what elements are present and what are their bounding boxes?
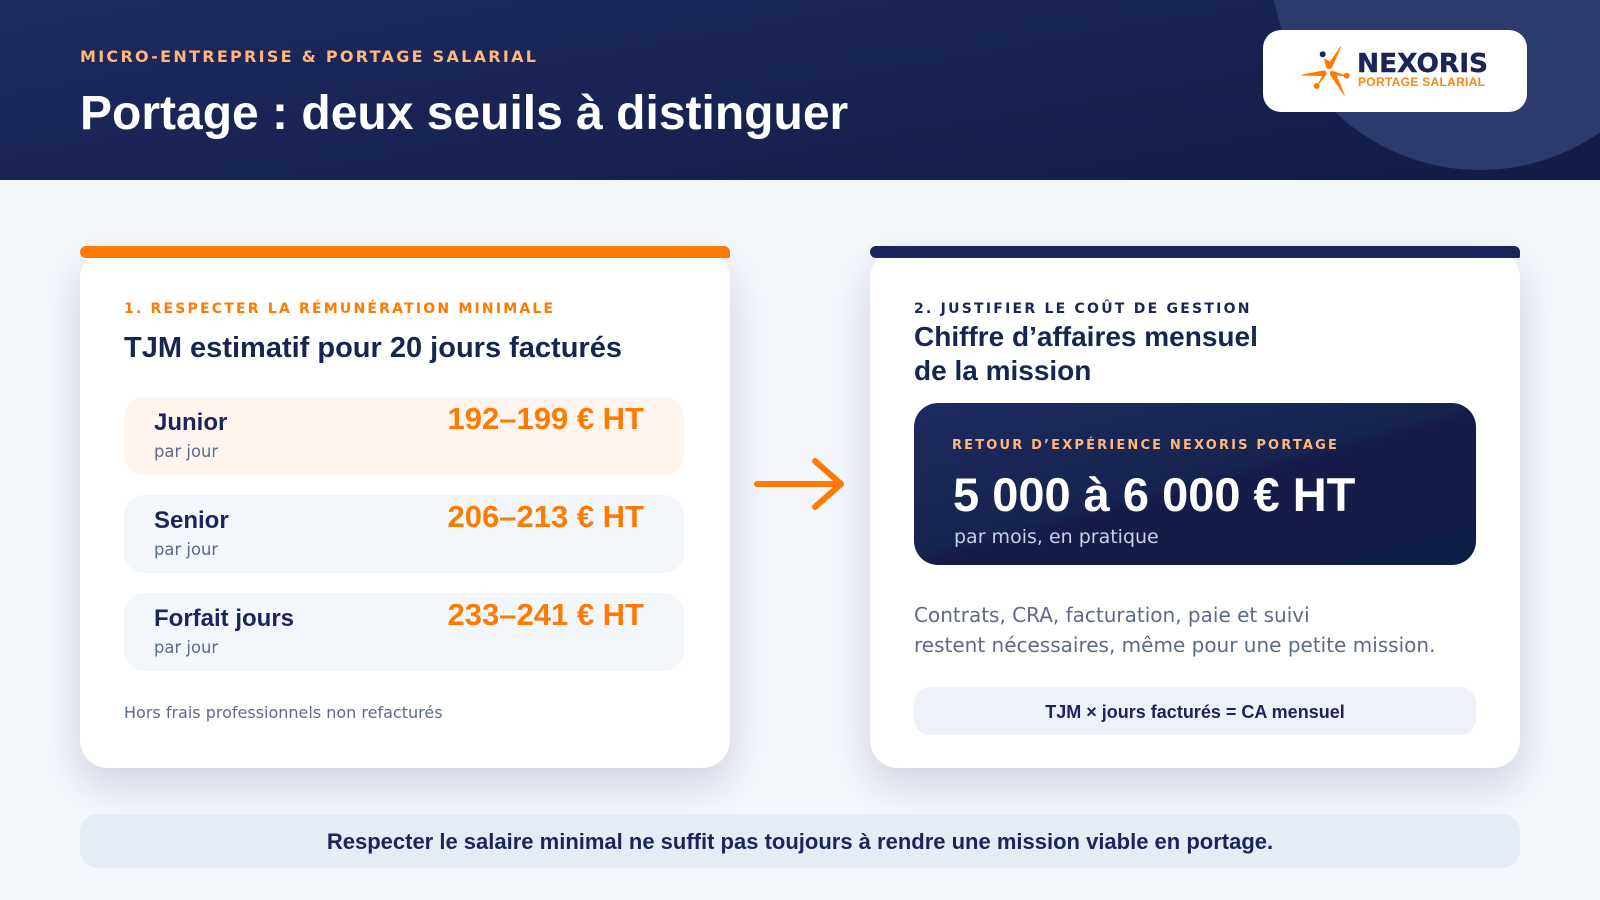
- title: Portage : deux seuils à distinguer: [80, 87, 848, 140]
- header band: [0, 0, 1600, 180]
- logo card: [1263, 30, 1527, 112]
- explanation text: restent nécessaires, même pour une petite mission.: [914, 633, 1435, 657]
- row: junior: Junior: [154, 409, 227, 436]
- panel: left card: [66, 246, 744, 798]
- card heading: TJM estimatif pour 20 jours facturés: [124, 332, 622, 364]
- card body: [870, 250, 1520, 768]
- row: senior: [124, 495, 684, 573]
- bottom banner: [80, 814, 1520, 868]
- row: forfait jours: [124, 593, 684, 671]
- section label: 2. JUSTIFIER LE COÛT DE GESTION: [914, 301, 1252, 317]
- card heading: [914, 321, 1258, 386]
- callout label: RETOUR D’EXPÉRIENCE NEXORIS PORTAGE: [952, 438, 1339, 453]
- navy callout: [914, 403, 1476, 565]
- logo: NEXORIS: [1357, 49, 1488, 79]
- panel: right card: [856, 246, 1534, 798]
- navy top bar: [870, 246, 1520, 258]
- decorative circle: [1270, 0, 1600, 170]
- row: junior: [124, 397, 684, 475]
- card body: [80, 250, 730, 768]
- formula: TJM × jours facturés = CA mensuel: [1045, 702, 1345, 722]
- row: senior: Senior: [154, 507, 229, 534]
- row: senior: 206–213 € HT: [448, 499, 644, 534]
- row: senior: par jour: [154, 540, 218, 559]
- section label: 1. RESPECTER LA RÉMUNÉRATION MINIMALE: [124, 301, 555, 317]
- formula: [914, 687, 1476, 735]
- callout subtext: par mois, en pratique: [954, 526, 1159, 548]
- explanation text: Contrats, CRA, facturation, paie et suivi: [914, 603, 1310, 627]
- bottom banner: Respecter le salaire minimal ne suffit pas toujours à rendre une mission viable en portage.: [327, 829, 1273, 854]
- eyebrow: MICRO-ENTREPRISE & PORTAGE SALARIAL: [80, 47, 538, 66]
- callout value: 5 000 à 6 000 € HT: [953, 468, 1355, 521]
- card heading: Chiffre d’affaires mensuel: [914, 321, 1258, 352]
- row: junior: par jour: [154, 442, 218, 461]
- row: forfait jours: par jour: [154, 638, 218, 657]
- row: junior: 192–199 € HT: [448, 401, 644, 436]
- arrow: [754, 458, 844, 510]
- orange top bar: [80, 246, 730, 258]
- row: forfait jours: 233–241 € HT: [448, 597, 644, 632]
- footnote: Hors frais professionnels non refacturés: [124, 703, 443, 722]
- card heading: de la mission: [914, 355, 1091, 386]
- logo: [1302, 46, 1488, 96]
- logo: PORTAGE SALARIAL: [1358, 75, 1485, 89]
- explanation text: [914, 603, 1435, 657]
- row: forfait jours: Forfait jours: [154, 605, 294, 632]
